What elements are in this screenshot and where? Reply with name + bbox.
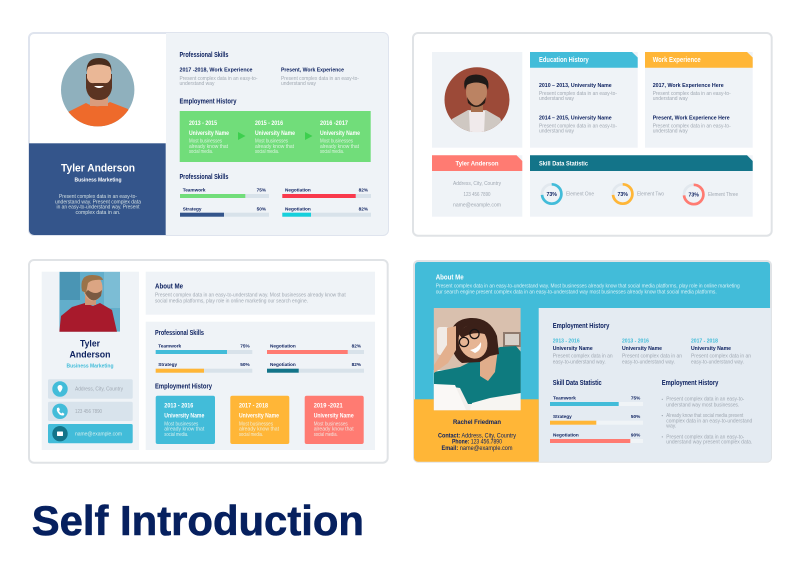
employment history green timeline: 2013 - 2015 xyxy=(189,121,218,127)
employment history bullets: understand way most businesses. xyxy=(666,402,739,408)
panel: work experience: Work Experience xyxy=(653,57,701,64)
contact row: phone xyxy=(48,402,133,421)
panel: education history: understand way xyxy=(539,96,574,102)
employment history columns: 2013 - 2016 xyxy=(622,338,650,344)
name block: Business Marketing xyxy=(74,178,122,184)
employment history columns: 2013 - 2016 xyxy=(553,338,580,344)
panel: work experience: Present, Work Experience Here xyxy=(653,115,730,121)
skill bars xyxy=(156,343,364,373)
employment history columns: easy-to-understand way. xyxy=(622,359,675,365)
employment history green timeline: University Name xyxy=(320,131,361,137)
donut: element three: 73% xyxy=(688,192,700,198)
name and role: Business Marketing xyxy=(66,364,114,370)
professional skills text: 2017 -2018, Work Experience xyxy=(180,68,253,74)
panel: skills and employment: Employment History xyxy=(155,381,212,390)
donut: element two xyxy=(613,184,664,204)
panel: resume template three xyxy=(29,260,388,463)
skill bars: Teamwork xyxy=(158,343,182,348)
professional skills text: understand way xyxy=(281,81,316,87)
skill bars: Strategy xyxy=(183,206,202,211)
name block: understand way. Present complex data xyxy=(55,200,141,206)
panel: contact card xyxy=(432,155,522,217)
employment history green timeline xyxy=(180,111,371,162)
employment history green timeline: social media. xyxy=(320,149,344,155)
panel: education history xyxy=(530,52,638,148)
name and role: Tyler xyxy=(80,339,100,350)
employment card: 2019-2021: University Name xyxy=(314,413,354,419)
employment history green timeline: Most businesses xyxy=(189,139,222,145)
employment card: 2013-2016 xyxy=(156,396,215,444)
contact row: address: Address, City, Country xyxy=(75,387,123,393)
donut: element two: 73% xyxy=(617,192,629,198)
employment history bullets xyxy=(662,378,752,446)
name block: complex data in an. xyxy=(76,210,120,216)
employment history columns: Present complex data in an xyxy=(553,354,613,360)
contact row: email: name@example.com xyxy=(75,431,122,437)
employment history columns: Present complex data in an xyxy=(691,354,751,360)
donut: element three xyxy=(684,185,738,204)
panel: resume template four xyxy=(414,261,772,462)
employment history columns xyxy=(553,321,751,365)
employment history green timeline: already know that xyxy=(320,144,359,150)
skill bars: Negotiation xyxy=(270,343,296,348)
skill bars: Negotiation xyxy=(270,362,296,367)
employment history columns: University Name xyxy=(691,346,732,352)
employment history columns: University Name xyxy=(622,346,663,352)
panel: skills and employment: Professional Skills xyxy=(155,328,204,337)
photo: man in red shirt xyxy=(59,272,120,332)
panel: contact card: 123 456 7890 xyxy=(464,192,490,198)
title: Self Introduction xyxy=(32,497,364,544)
skill data statistic bars xyxy=(550,378,643,443)
professional skills text xyxy=(180,50,359,87)
panel: resume template two xyxy=(413,33,772,236)
employment history bullets: Present complex data in an easy-to- xyxy=(666,434,744,440)
panel: work experience: understand way xyxy=(653,96,688,102)
employment history columns: easy-to-understand way. xyxy=(553,359,606,365)
employment card: 2017-2018: Most businesses xyxy=(239,421,273,427)
skill bars: 82% xyxy=(359,206,369,211)
panel: about me: About Me xyxy=(155,282,183,291)
donut: element two: Element Two xyxy=(637,191,664,197)
employment history columns: 2017 - 2018 xyxy=(691,338,719,344)
skill bars: Teamwork xyxy=(183,188,206,193)
panel: resume template one xyxy=(29,33,388,235)
employment card: 2017-2018: social media. xyxy=(239,432,263,438)
employment history green timeline: 2016 -2017 xyxy=(320,121,349,127)
contact details: Contact: Address, City, Country xyxy=(438,432,517,439)
employment history columns: Present complex data in an xyxy=(622,354,682,360)
employment history bullets: complex data in an easy-to-understand xyxy=(666,418,752,424)
panel: work experience xyxy=(645,52,753,148)
panel: about me xyxy=(146,272,375,315)
employment history green timeline: Most businesses xyxy=(320,139,353,145)
panel: about me: Present complex data in an easy-to-understand way. Most businesses already know that xyxy=(155,293,346,299)
professional skills text: Present complex data in an easy-to- xyxy=(281,76,359,82)
employment history columns: University Name xyxy=(553,346,593,352)
panel: education history: Present complex data in an easy-to- xyxy=(539,91,617,97)
employment card: 2013-2016: social media. xyxy=(164,432,188,438)
about me banner: Present complex data in an easy-to-understand way. Most businesses already know that social media platforms, play role in online marketing xyxy=(436,284,740,290)
skill data statistic bars: 90% xyxy=(631,432,641,437)
employment history green timeline: social media. xyxy=(255,149,279,155)
employment card: 2019-2021: 2019 -2021 xyxy=(314,403,343,409)
employment history bullets: understand way present complex data. xyxy=(666,440,752,446)
name block: Present complex data in an easy-to- xyxy=(59,194,137,200)
employment history green timeline: social media. xyxy=(189,149,213,155)
contact row: address xyxy=(48,379,133,399)
photo: smiling woman with glasses xyxy=(434,308,521,411)
employment history green timeline: already know that xyxy=(189,144,228,150)
panel: contact card: name@example.com xyxy=(453,203,501,209)
skill data statistic bars: 75% xyxy=(631,395,641,400)
employment card: 2017-2018: 2017 - 2018 xyxy=(239,403,269,409)
photo: bearded man in orange shirt xyxy=(60,52,136,128)
skill bars xyxy=(180,172,371,217)
employment card: 2017-2018: already know that xyxy=(239,427,279,433)
professional skills text: understand way xyxy=(180,81,215,87)
employment card: 2013-2016: already know that xyxy=(164,427,205,433)
employment history columns: easy-to-understand way. xyxy=(691,359,744,365)
donut: element one xyxy=(542,184,594,204)
employment history bullets: Employment History xyxy=(662,378,718,387)
professional skills text: Present complex data in an easy-to- xyxy=(180,76,258,82)
employment history columns: Employment History xyxy=(553,321,609,330)
employment history green timeline: Most businesses xyxy=(255,139,288,145)
professional skills text: Professional Skills xyxy=(180,50,228,59)
name block: Tyler Anderson xyxy=(61,163,135,175)
about me banner xyxy=(436,274,740,295)
skill bars: 82% xyxy=(352,343,362,348)
photo: man against brick wall xyxy=(444,66,510,134)
panel: work experience: understand way xyxy=(653,128,688,134)
name and role xyxy=(66,339,114,370)
employment history heading: Employment History xyxy=(180,97,236,106)
name and role: Anderson xyxy=(70,349,111,360)
employment card: 2013-2016: University Name xyxy=(164,413,205,419)
skill data statistic bars: 50% xyxy=(631,414,641,419)
skill data statistic bars: Teamwork xyxy=(553,395,576,400)
panel: about me: social media platforms, play role in online marketing our search engine. xyxy=(155,298,308,304)
skill bars: Negotiation xyxy=(285,188,311,193)
contact details: Phone: 123 456.7890 xyxy=(452,439,502,446)
employment card: 2017-2018: University Name xyxy=(239,413,280,419)
skill bars: Professional Skills xyxy=(180,172,228,181)
employment history green timeline: 2015 - 2016 xyxy=(255,121,284,127)
skill bars: 50% xyxy=(240,362,251,367)
employment card: 2013-2016: Most businesses xyxy=(164,421,199,427)
panel: work experience: Present complex data in an easy-to- xyxy=(653,91,731,97)
panel: work experience: 2017, Work Experience Here xyxy=(653,83,724,89)
employment card: 2019-2021: Most businesses xyxy=(314,421,348,427)
skill bars: 75% xyxy=(257,188,267,193)
panel: skill data statistic xyxy=(530,155,753,217)
skill bars: Negotiation xyxy=(285,206,311,211)
employment card: 2017-2018 xyxy=(230,396,289,444)
skill data statistic bars: Negotiation xyxy=(553,432,579,437)
skill data statistic bars: Strategy xyxy=(553,414,572,419)
employment card: 2019-2021 xyxy=(305,396,364,444)
employment history bullets: Present complex data in an easy-to- xyxy=(666,397,744,403)
skill bars: 50% xyxy=(257,206,267,211)
employment card: 2013-2016: 2013 - 2016 xyxy=(164,403,194,409)
employment card: 2019-2021: already know that xyxy=(314,427,354,433)
contact details: Email: name@example.com xyxy=(442,445,512,452)
skill bars: Strategy xyxy=(158,362,177,367)
skill bars: 75% xyxy=(240,343,251,348)
panel: work experience: Present complex data in an easy-to- xyxy=(653,123,731,129)
skill data statistic bars: Skill Data Statistic xyxy=(553,378,602,387)
panel: education history: Present complex data in an easy-to- xyxy=(539,123,617,129)
panel: skill data statistic: Skill Data Statistic xyxy=(539,160,588,167)
contact details xyxy=(438,419,517,452)
name block xyxy=(55,163,141,216)
name block: in an easy-to-understand way. Present xyxy=(56,205,140,211)
employment history green timeline: University Name xyxy=(255,131,296,137)
panel: skills and employment xyxy=(146,322,375,450)
about me banner: About Me xyxy=(436,274,464,281)
professional skills text: Present, Work Experience xyxy=(281,68,345,74)
skill bars: 82% xyxy=(352,362,362,367)
panel: education history: understand way xyxy=(539,128,574,134)
donut: element three: Element Three xyxy=(708,192,738,198)
contact row: phone: 123 456 7890 xyxy=(75,409,102,415)
panel: contact card: Tyler Anderson xyxy=(456,160,499,167)
contact details: Rachel Friedman xyxy=(453,419,501,426)
donut: element one: Element One xyxy=(566,191,594,197)
employment history bullets: Already know that social media present xyxy=(666,413,744,419)
panel: education history: Education History xyxy=(539,57,589,64)
panel: education history: 2010 – 2013, University Name xyxy=(539,83,612,89)
contact row: email xyxy=(48,424,133,443)
panel: contact card: Address, City, Country xyxy=(453,181,501,187)
employment history bullets: way. xyxy=(665,424,676,430)
panel: education history: 2014 – 2015, University Name xyxy=(539,115,612,121)
skill bars: 82% xyxy=(359,188,369,193)
employment card: 2019-2021: social media. xyxy=(314,432,338,438)
donut: element one: 73% xyxy=(546,192,558,198)
employment history green timeline: University Name xyxy=(189,131,230,137)
about me banner: our search engine present complex data in an easy-to-understand way most businesses already know that social media platforms. xyxy=(436,289,717,295)
employment history green timeline: already know that xyxy=(255,144,294,150)
